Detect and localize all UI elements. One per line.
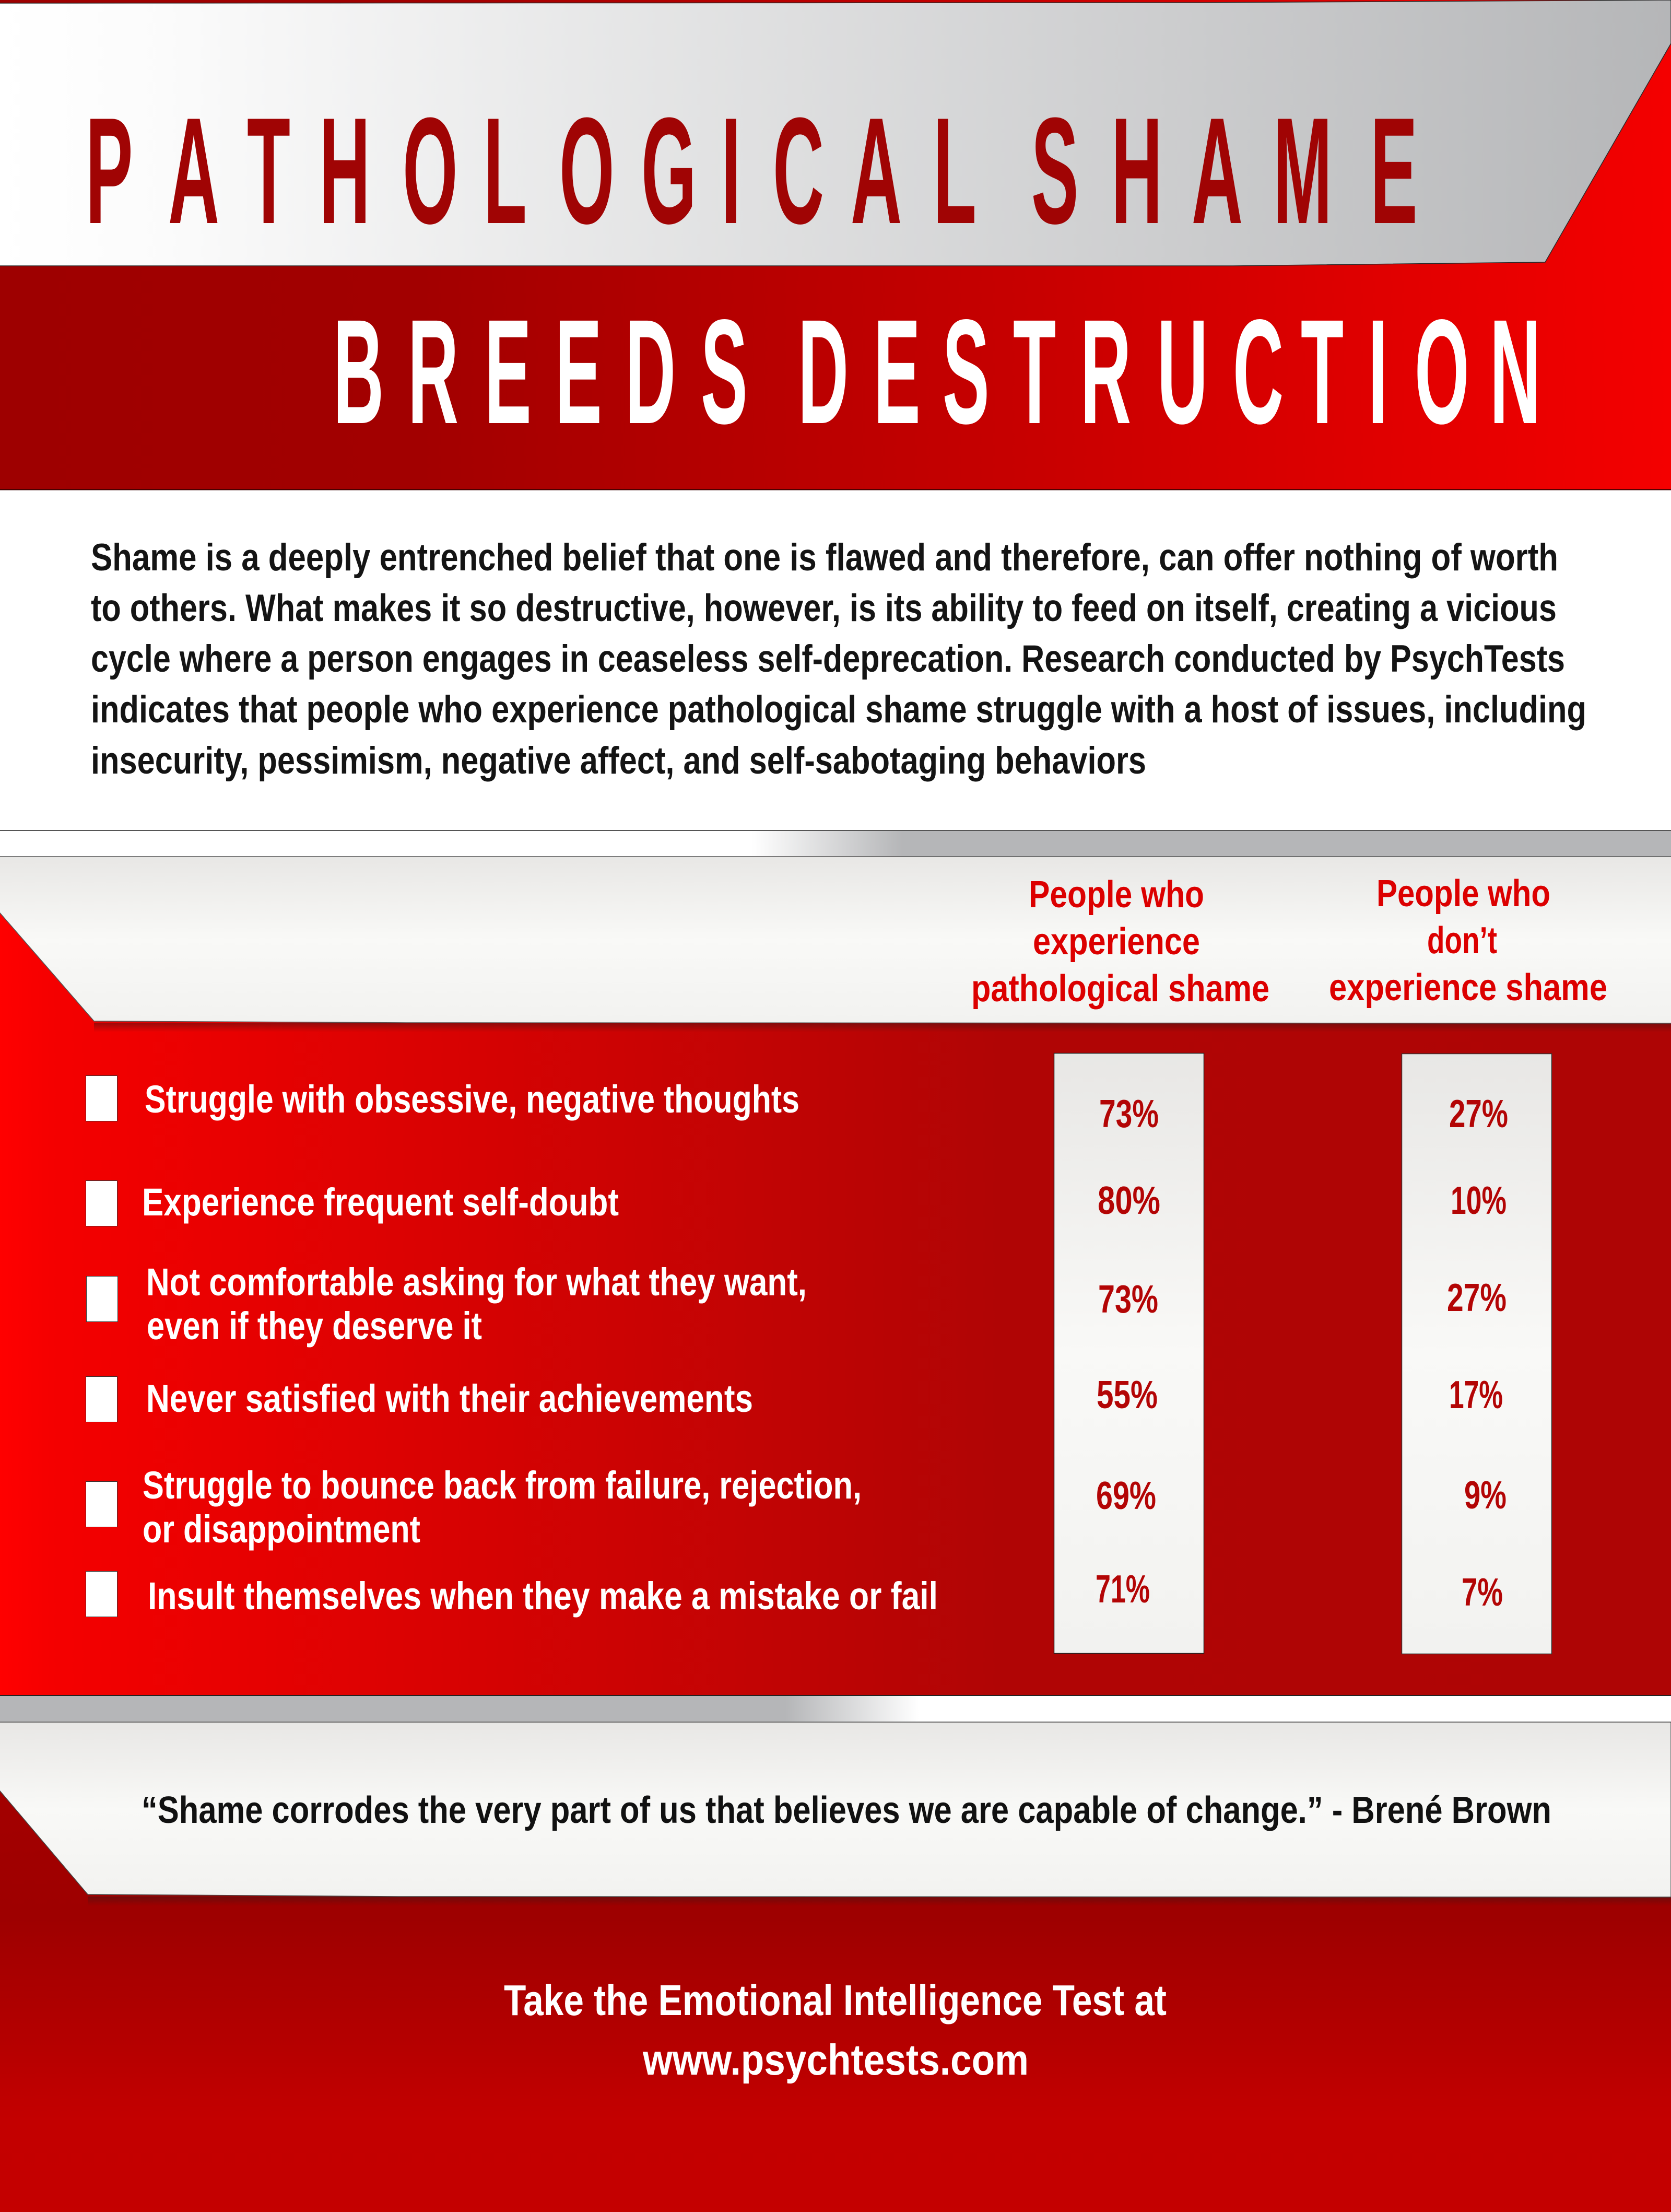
checkbox 6 <box>86 1571 117 1617</box>
footer red background <box>0 1791 1671 2212</box>
call to action: Take the Emotional Intelligence Test at <box>504 1976 1167 2024</box>
value 17%: 17% <box>1449 1373 1503 1417</box>
column heading: no shame: don’t <box>1427 920 1497 962</box>
checkbox 1 <box>86 1076 117 1121</box>
column heading: no shame: People who <box>1376 873 1550 915</box>
intro paragraph <box>91 536 1586 782</box>
statement 6: Insult themselves when they make a mistake or fail <box>148 1574 938 1618</box>
value 7%: 7% <box>1462 1570 1503 1614</box>
column heading: pathological shame: People who <box>1029 874 1204 916</box>
value 27%: 27% <box>1447 1275 1507 1319</box>
checkbox 4 <box>86 1377 117 1422</box>
title line 2: BREEDS DESTRUCTION <box>333 289 1540 455</box>
table header shadow <box>94 1023 1671 1032</box>
value 27%: 27% <box>1449 1092 1508 1136</box>
value 55%: 55% <box>1097 1373 1158 1417</box>
column heading: pathological shame <box>971 874 1269 1010</box>
statement 3: Not comfortable asking for what they want, <box>146 1260 807 1304</box>
checkbox 2 <box>86 1180 117 1226</box>
column heading: pathological shame: experience <box>1033 921 1200 963</box>
statement 2: Experience frequent self-doubt <box>142 1180 619 1224</box>
call to action: www.psychtests.com <box>642 2035 1029 2084</box>
column heading: no shame: experience shame <box>1329 967 1607 1009</box>
value 80%: 80% <box>1098 1178 1160 1222</box>
divider strip below table <box>0 1695 1671 1722</box>
column heading: pathological shame: pathological shame <box>971 968 1269 1010</box>
statement 5: Struggle to bounce back from failure, rejection, <box>143 1464 862 1507</box>
intro paragraph: insecurity, pessimism, negative affect, and self-sabotaging behaviors <box>91 740 1146 782</box>
divider strip above table <box>0 830 1671 857</box>
value 10%: 10% <box>1451 1178 1507 1222</box>
statement 5 <box>143 1464 862 1551</box>
header band <box>0 0 1671 490</box>
quote panel <box>0 1722 1671 1897</box>
statement 5: or disappointment <box>143 1507 420 1551</box>
table red background <box>0 913 1671 1695</box>
value 73%: 73% <box>1098 1277 1158 1321</box>
column heading: no shame <box>1329 873 1607 1009</box>
value 71%: 71% <box>1096 1567 1150 1611</box>
bar column 1 <box>1054 1053 1204 1654</box>
statement 3 <box>146 1260 807 1348</box>
statements list <box>86 1076 938 1618</box>
bar column 2 <box>1402 1054 1552 1654</box>
title line 1: PATHOLOGICAL SHAME <box>86 86 1418 255</box>
statement 3: even if they deserve it <box>147 1304 482 1348</box>
quote panel shadow <box>88 1897 1671 1906</box>
checkbox 5 <box>86 1481 117 1527</box>
statement 4: Never satisfied with their achievements <box>146 1377 753 1420</box>
statement 1: Struggle with obsessive, negative thoughts <box>145 1078 799 1121</box>
value 73%: 73% <box>1099 1092 1159 1136</box>
call to action <box>504 1976 1167 2084</box>
value 69%: 69% <box>1096 1473 1156 1517</box>
value 9%: 9% <box>1464 1473 1507 1517</box>
checkbox 3 <box>87 1277 118 1321</box>
table header panel <box>0 857 1671 1023</box>
